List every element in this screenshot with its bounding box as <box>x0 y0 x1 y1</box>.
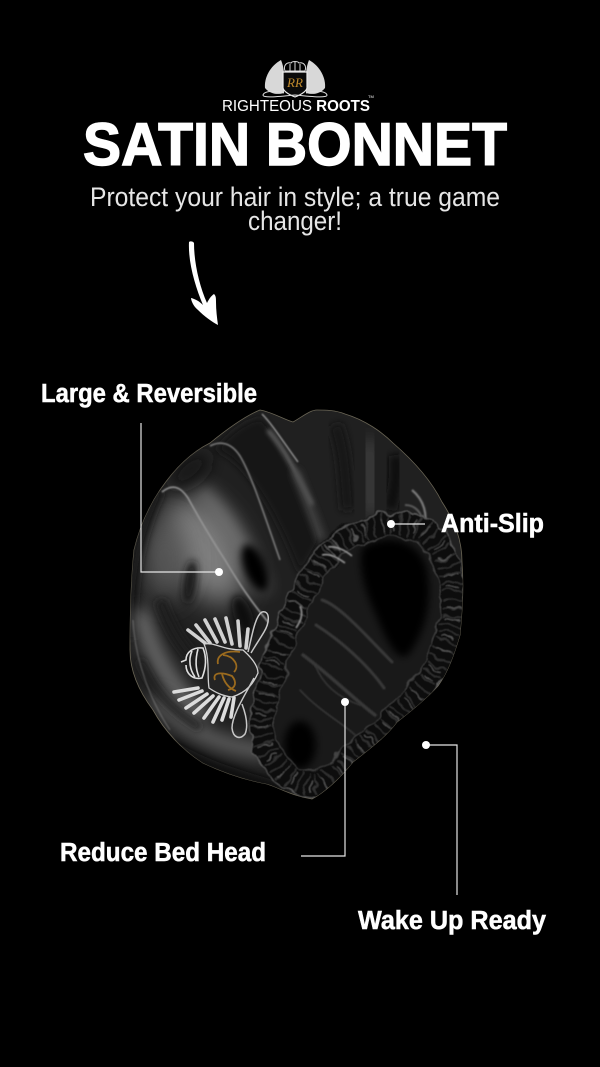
logo: Righteous Roots <box>222 60 374 115</box>
marker dot <box>422 741 430 749</box>
upper wing <box>188 618 248 648</box>
subtitle: Protect your hair in style; a true game <box>90 182 500 212</box>
subtitle <box>90 182 500 236</box>
lining lower shadow <box>284 721 316 769</box>
arrow pointing down <box>189 241 218 325</box>
scroll loops <box>232 612 268 737</box>
dark hollows <box>235 541 275 595</box>
leader line <box>301 702 345 856</box>
crisp fold edges <box>162 487 268 622</box>
logo left wing <box>265 60 284 94</box>
marker dot <box>387 520 395 528</box>
label text: Large & Reversible <box>41 380 257 408</box>
bonnet satin folds <box>132 414 425 790</box>
leader line <box>141 423 219 572</box>
label text: Wake Up Ready <box>358 907 547 935</box>
logo scrolls <box>263 91 327 97</box>
marker dot <box>215 568 223 576</box>
lining folds <box>300 600 392 735</box>
shield <box>204 644 258 697</box>
bonnet illustration <box>130 410 466 799</box>
lower wing <box>174 688 234 722</box>
upper fold shadow <box>218 418 316 567</box>
label: Large & Reversible <box>41 380 257 576</box>
crown <box>181 648 206 678</box>
lower left satin bands <box>140 610 205 715</box>
left edge shade <box>132 490 160 640</box>
label text: Anti-Slip <box>441 510 544 538</box>
trademark: TM <box>368 94 374 99</box>
marker dot <box>341 698 349 706</box>
label: Anti-Slip <box>387 510 544 538</box>
lining deep shadow <box>361 540 429 657</box>
title: SATIN BONNET <box>83 111 507 178</box>
logo shield <box>283 72 307 97</box>
label text: Reduce Bed Head <box>60 839 266 867</box>
bonnet opening lining <box>263 526 452 784</box>
highlights on upper folds <box>268 430 312 505</box>
logo wordmark: RIGHTEOUS ROOTS <box>222 98 370 115</box>
label: Wake Up Ready <box>358 741 547 935</box>
logo monogram: RR <box>286 75 303 90</box>
bright elastic highlights <box>296 547 352 628</box>
logo crown <box>284 61 306 71</box>
leader line <box>426 745 457 895</box>
large glow left lobe <box>148 483 262 617</box>
logo right wing <box>306 60 325 94</box>
monogram <box>214 652 240 691</box>
elastic gathered edge <box>250 512 466 798</box>
bonnet base <box>130 410 463 799</box>
label: Reduce Bed Head <box>60 698 349 867</box>
bonnet logo print <box>174 612 268 737</box>
leader line <box>391 523 425 525</box>
subtitle: changer! <box>248 206 342 236</box>
